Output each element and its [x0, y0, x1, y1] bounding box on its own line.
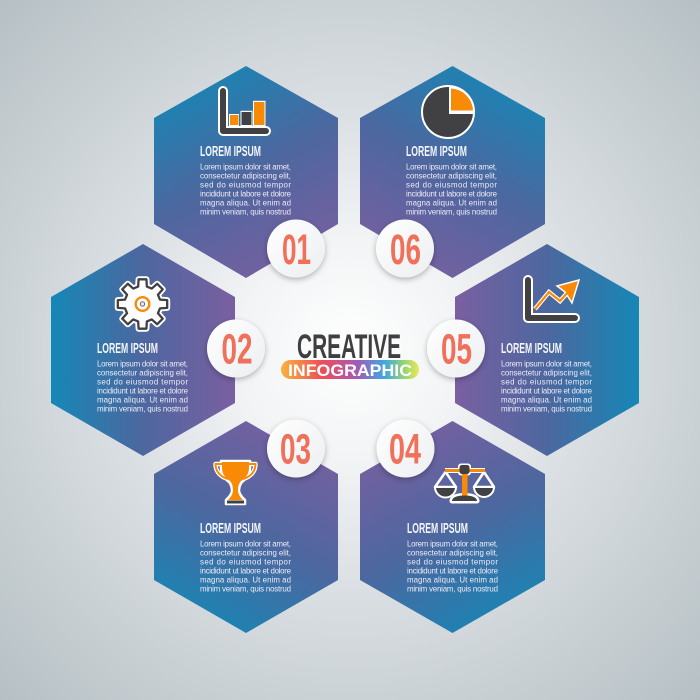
number badge 02: 02 [222, 326, 252, 374]
number badge 03: 03 [280, 426, 311, 474]
number badge 05: 05 [441, 326, 472, 374]
text block: 02 [97, 360, 189, 414]
heading: 06: LOREM IPSUM [406, 144, 467, 160]
text block: 04: sed do eiusmod tempor [407, 558, 498, 566]
number badge 05 [427, 320, 485, 378]
text block: 02: incididunt ut labore et dolore [97, 386, 189, 396]
heading: 03: LOREM IPSUM [200, 521, 261, 537]
text block: 06: Lorem ipsum dolor sit amet, [406, 162, 497, 172]
text block: 01: sed do eiusmod tempor [200, 180, 291, 190]
title word: creative: CREATIVE [297, 328, 401, 366]
text block: 06: consectetur adipiscing elit, [406, 172, 497, 180]
text block: 06: incididunt ut labore et dolore [406, 190, 498, 198]
rainbow pill [281, 360, 419, 379]
number badge 02 [207, 320, 265, 378]
text block: 02: magna aliqua. Ut enim ad [97, 396, 188, 404]
panel: 06 hexagon [360, 66, 545, 278]
text block: 03: consectetur adipiscing elit, [200, 548, 291, 558]
text block: 04: consectetur adipiscing elit, [407, 548, 498, 558]
icon: pie chart [422, 86, 474, 138]
text block: 01 [200, 162, 292, 216]
panel: 03 hexagon [154, 421, 338, 633]
text block: 05 [501, 360, 593, 414]
text block: 03: Lorem ipsum dolor sit amet, [200, 540, 291, 548]
text block: 04: magna aliqua. Ut enim ad [407, 576, 498, 584]
number badge 01: 01 [282, 227, 311, 274]
heading: 05: LOREM IPSUM [501, 341, 562, 357]
number badge 04 [376, 420, 434, 478]
text block: 05: minim veniam, quis nostrud [501, 404, 592, 414]
number badge 06: 06 [390, 227, 421, 274]
number badge 01 [267, 220, 325, 278]
title word: infographic: INFOGRAPHIC [288, 362, 412, 380]
heading: 04: LOREM IPSUM [407, 521, 468, 537]
text block: 04: Lorem ipsum dolor sit amet, [407, 540, 498, 548]
panel: 05 hexagon [455, 244, 639, 456]
text block: 02: consectetur adipiscing elit, [97, 368, 188, 378]
icon: scales [435, 464, 494, 501]
icon: trend chart [528, 280, 579, 318]
text block: 06: magna aliqua. Ut enim ad [406, 198, 497, 208]
text block: 01: Lorem ipsum dolor sit amet, [200, 162, 291, 172]
text block: 03: incididunt ut labore et dolore [200, 566, 292, 576]
text block: 06: sed do eiusmod tempor [406, 180, 497, 190]
text block: 01: minim veniam, quis nostrud [200, 208, 291, 216]
text block: 01: magna aliqua. Ut enim ad [200, 198, 291, 208]
panel: 01 hexagon [154, 66, 338, 278]
text block: 06 [406, 162, 498, 216]
text block: 05: sed do eiusmod tempor [501, 378, 592, 386]
text block: 04 [407, 540, 499, 594]
text block: 03: magna aliqua. Ut enim ad [200, 576, 291, 584]
heading: 01: LOREM IPSUM [200, 144, 261, 160]
number badge 06 [376, 220, 434, 278]
text block: 02: Lorem ipsum dolor sit amet, [97, 360, 188, 368]
text block: 02: sed do eiusmod tempor [97, 378, 188, 386]
text block: 02: minim veniam, quis nostrud [97, 404, 188, 414]
text block: 03: minim veniam, quis nostrud [200, 584, 291, 594]
text block: 03: sed do eiusmod tempor [200, 558, 291, 566]
panel: 04 hexagon [360, 421, 545, 633]
icon: trophy [216, 461, 256, 504]
text block: 04: incididunt ut labore et dolore [407, 566, 499, 576]
heading: 02: LOREM IPSUM [97, 341, 158, 357]
text block: 05: Lorem ipsum dolor sit amet, [501, 360, 592, 368]
panel: 02 hexagon [51, 244, 235, 456]
text block: 05: incididunt ut labore et dolore [501, 386, 593, 396]
icon: bar chart [223, 91, 266, 131]
text block: 05: magna aliqua. Ut enim ad [501, 396, 592, 404]
text block: 04: minim veniam, quis nostrud [407, 584, 498, 594]
title [281, 328, 419, 380]
text block: 05: consectetur adipiscing elit, [501, 368, 592, 378]
text block: 03 [200, 540, 292, 594]
number badge 04: 04 [389, 426, 421, 474]
text block: 01: consectetur adipiscing elit, [200, 172, 291, 180]
icon: gear [118, 279, 167, 329]
text block: 01: incididunt ut labore et dolore [200, 190, 292, 198]
number badge 03 [267, 420, 325, 478]
text block: 06: minim veniam, quis nostrud [406, 208, 497, 216]
